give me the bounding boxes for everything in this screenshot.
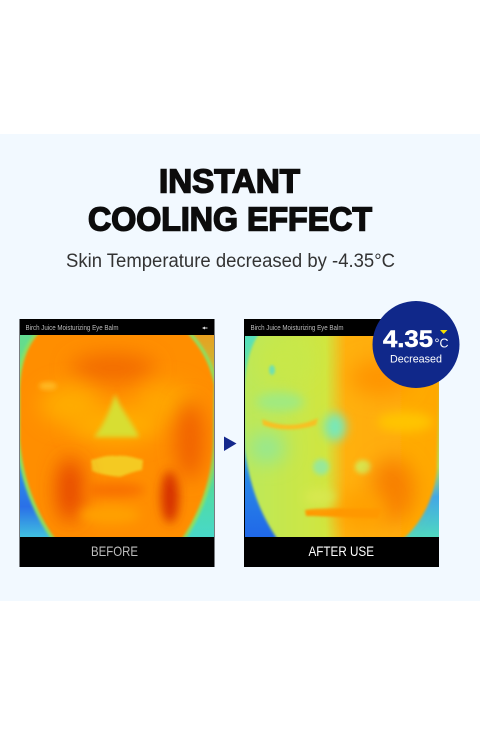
thermal face: before	[20, 332, 214, 540]
panel: after use thermal image	[244, 319, 439, 567]
callout: 4.35 degrees decreased badge	[372, 301, 460, 388]
subtitle: Skin Temperature decreased by -4.35°C	[66, 251, 395, 272]
image header caption: Birch Juice Moisturizing Eye Balm	[26, 325, 119, 332]
panel: before thermal image	[20, 319, 214, 567]
after use label: AFTER USE	[308, 543, 374, 559]
arrow	[224, 436, 236, 451]
callout: 4.35 degrees decreased badge: Decreased	[390, 354, 442, 366]
title	[88, 162, 372, 238]
before label: BEFORE	[91, 543, 138, 559]
title: INSTANT	[159, 162, 300, 200]
thermal face: after	[244, 332, 439, 540]
image header caption: Birch Juice Moisturizing Eye Balm	[250, 325, 344, 332]
title: COOLING EFFECT	[88, 200, 372, 238]
callout: 4.35 degrees decreased badge: °C	[434, 336, 448, 350]
infographic canvas	[0, 134, 480, 601]
icon: yellow down triangle	[440, 330, 448, 334]
icon: small arrow	[202, 326, 208, 330]
panel: pale blue background	[0, 134, 480, 601]
callout: 4.35 degrees decreased badge: 4.35	[383, 326, 433, 353]
